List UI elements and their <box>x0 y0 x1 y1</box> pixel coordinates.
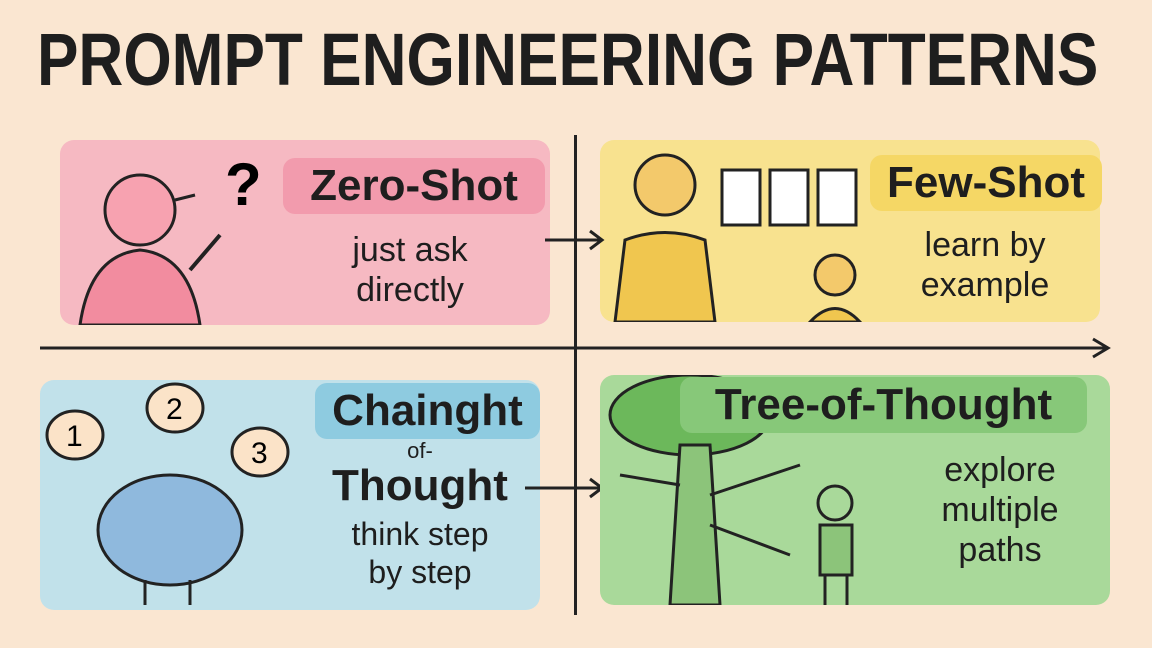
icon: tree and person <box>608 375 854 605</box>
icon: brain with numbered thoughts: 2 <box>166 393 183 426</box>
heading: chainght: Chainght <box>332 386 523 435</box>
heading: zero-shot: Zero-Shot <box>310 161 518 210</box>
text: of- Thought <box>332 438 508 510</box>
axis: horizontal arrow <box>40 338 1111 358</box>
text: explore multiple paths: multiple <box>941 491 1059 529</box>
text: just ask directly: directly <box>356 271 464 309</box>
heading: zero-shot <box>283 158 545 214</box>
text: just ask directly: just ask <box>352 231 468 269</box>
heading: tree-of-thought: Tree-of-Thought <box>715 380 1052 429</box>
text: think step by step: think step <box>352 516 488 552</box>
text: just ask directly <box>352 231 468 309</box>
title: PROMPT ENGINEERING PATTERNS <box>37 18 1098 101</box>
icon: brain with numbered thoughts: 1 <box>66 420 83 453</box>
text: explore multiple paths <box>941 451 1059 569</box>
text: learn by example: learn by <box>925 226 1045 264</box>
panel: chain-of-thought <box>40 380 540 610</box>
heading: few-shot: Few-Shot <box>887 158 1085 207</box>
icon: teacher and cards <box>614 154 862 322</box>
icon: brain with numbered thoughts: 3 <box>251 437 268 470</box>
icon: brain with numbered thoughts <box>46 382 290 605</box>
axis: vertical divider <box>574 135 577 615</box>
icon: person with question: ? <box>225 151 262 218</box>
panel: tree-of-thought <box>600 375 1110 605</box>
arrow: bottom <box>525 478 600 498</box>
text: think step by step: by step <box>368 554 472 590</box>
arrow: top <box>545 230 604 250</box>
icon: person with question <box>78 151 262 325</box>
text: explore multiple paths: explore <box>944 451 1056 489</box>
text: learn by example: example <box>921 266 1049 304</box>
text: learn by example <box>921 226 1049 304</box>
text: think step by step <box>352 516 488 590</box>
panel: few-shot <box>600 140 1100 322</box>
panel: zero-shot <box>60 140 550 325</box>
text: of- Thought: of- <box>407 438 433 463</box>
text: of- Thought: Thought <box>332 461 508 510</box>
text: explore multiple paths: paths <box>958 531 1042 569</box>
